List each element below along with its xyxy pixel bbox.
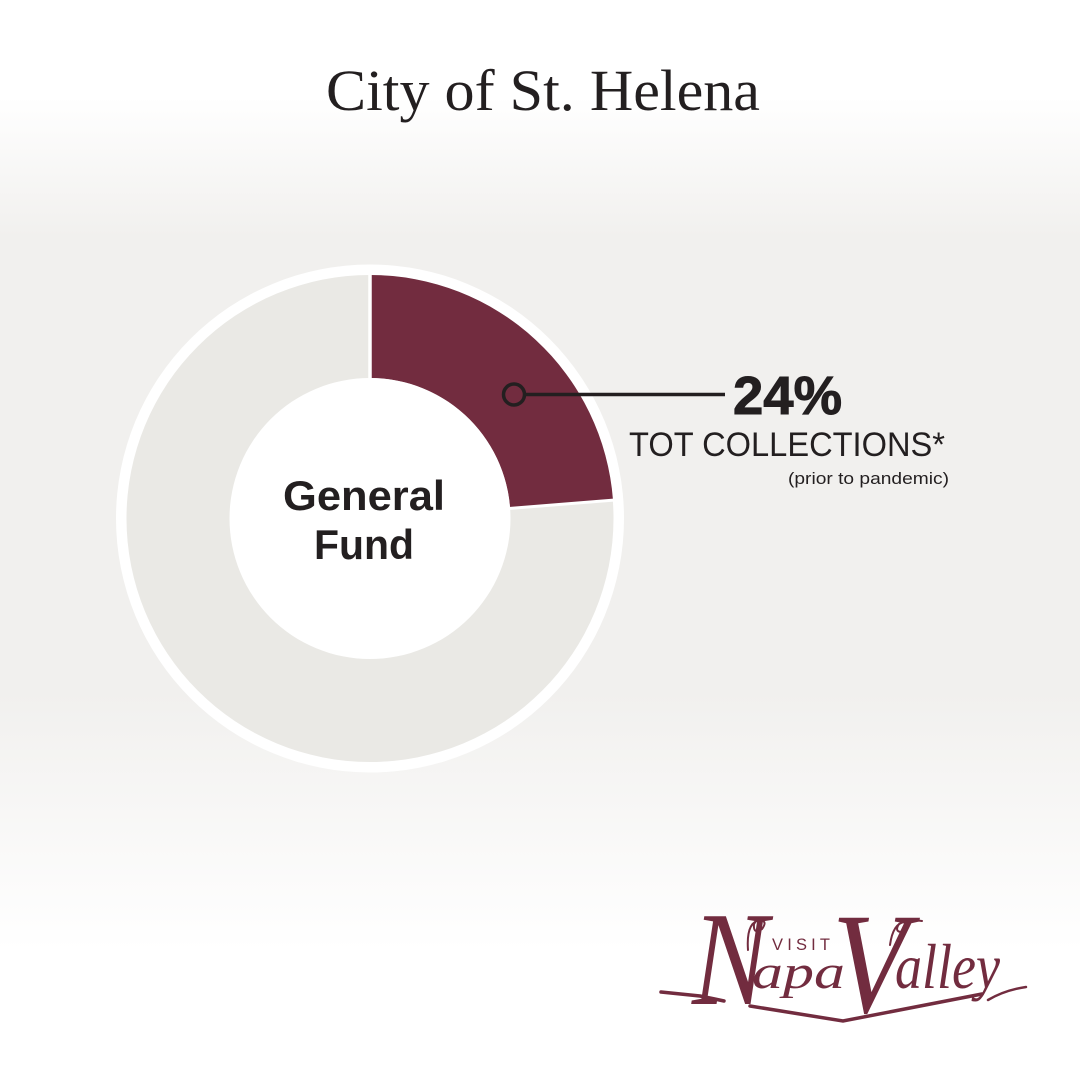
donut centre hole (230, 378, 510, 659)
logo small word: VISIT (772, 936, 830, 954)
donut centre label: Fund (314, 521, 414, 568)
logo wordmark (691, 885, 1001, 1044)
callout label: TOT COLLECTIONS* (629, 426, 945, 464)
logo wordmark: alley (895, 931, 1001, 1002)
callout leader line and marker (504, 384, 725, 405)
callout: 24% TOT collections (629, 366, 949, 488)
logo wordmark: apa (752, 946, 845, 999)
donut centre label: General (283, 472, 445, 519)
title: City of St. Helena (326, 58, 760, 123)
logo: Visit Napa Valley (661, 885, 1026, 1044)
donut centre label (283, 472, 445, 568)
donut chart (116, 264, 624, 772)
donut white outer ring (116, 264, 624, 772)
segment start edge (368, 270, 372, 380)
logo wordmark: N (691, 885, 774, 1033)
donut segment: 24% (370, 275, 613, 508)
logo underline and flourishes (661, 918, 1026, 1021)
segment separator (509, 500, 615, 508)
donut remainder segment (126, 275, 614, 762)
callout value: 24% (733, 366, 842, 426)
logo wordmark: V (832, 885, 920, 1044)
callout note: (prior to pandemic) (788, 469, 949, 488)
